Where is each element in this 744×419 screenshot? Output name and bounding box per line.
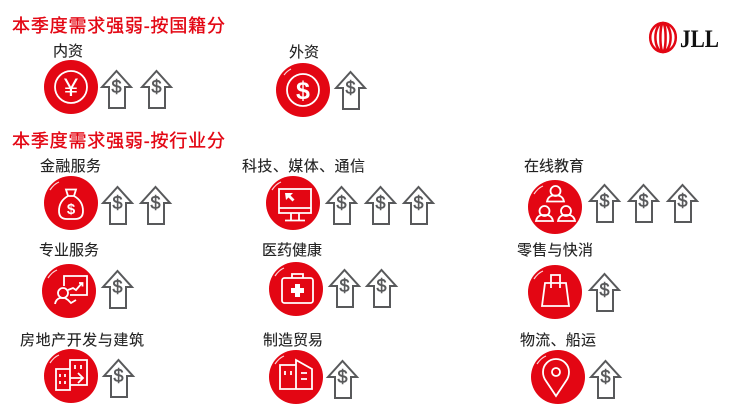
- arrow: up: $: [112, 193, 123, 213]
- icon: buildings: [44, 349, 98, 403]
- arrow: up: $: [111, 77, 122, 97]
- icon: presenter: [42, 264, 96, 318]
- item: tech media telecom: [242, 158, 433, 230]
- arrow: up: [327, 187, 356, 224]
- arrow: up: [590, 185, 619, 222]
- icon: dollar: $: [296, 77, 310, 105]
- item: tech media telecom: 科技、媒体、通信: [242, 158, 365, 175]
- icon: map pin: [531, 350, 585, 404]
- arrow: up: [404, 187, 433, 224]
- arrow: up: $: [339, 276, 350, 296]
- logo: JLL: JLL: [680, 26, 719, 53]
- arrow: up: $: [413, 193, 424, 213]
- icon: money bag: $: [67, 201, 76, 218]
- icon: shopping bag: [528, 265, 582, 319]
- item: online education: 在线教育: [524, 158, 584, 175]
- icon: people: [528, 180, 582, 234]
- item: retail: [517, 242, 619, 319]
- arrow: up: $: [600, 367, 611, 387]
- icon: medical kit: [269, 262, 323, 316]
- arrow: up: $: [336, 193, 347, 213]
- arrow: up: $: [638, 191, 649, 211]
- item: financial services: 金融服务: [40, 158, 101, 175]
- logo: JLL: [650, 23, 719, 53]
- arrow: up: [629, 185, 658, 222]
- arrow: up: $: [376, 276, 387, 296]
- item: foreign capital: 外资: [289, 44, 319, 61]
- arrow: up: $: [113, 366, 124, 386]
- icon: factory: [269, 350, 323, 404]
- arrow: up: [366, 187, 395, 224]
- arrow: up: [668, 185, 697, 222]
- item: real estate and construction: [20, 332, 144, 403]
- arrow: up: $: [599, 191, 610, 211]
- icon: monitor: [266, 176, 320, 230]
- item: real estate and construction: 房地产开发与建筑: [20, 332, 144, 349]
- item: domestic capital: 内资: [53, 43, 83, 60]
- item: healthcare: 医药健康: [262, 242, 322, 259]
- item: retail: 零售与快消: [517, 242, 593, 259]
- item: domestic capital: [44, 43, 171, 114]
- arrow: up: $: [150, 193, 161, 213]
- arrow: up: $: [375, 193, 386, 213]
- icon: yen: ¥: [63, 74, 78, 102]
- item: professional services: 专业服务: [39, 242, 99, 259]
- item: professional services: [39, 242, 132, 318]
- heading: by nationality: 本季度需求强弱-按国籍分: [12, 16, 225, 36]
- heading: by industry: 本季度需求强弱-按行业分: [12, 131, 225, 151]
- item: manufacturing and trade: [263, 332, 357, 404]
- item: online education: [524, 158, 697, 234]
- item: logistics and shipping: [520, 332, 620, 404]
- item: logistics and shipping: 物流、船运: [520, 332, 596, 349]
- item: healthcare: [262, 242, 396, 316]
- item: foreign capital: [276, 44, 365, 117]
- arrow: up: $: [151, 77, 162, 97]
- item: manufacturing and trade: 制造贸易: [263, 332, 323, 349]
- arrow: up: $: [337, 367, 348, 387]
- arrow: up: $: [345, 78, 356, 98]
- item: financial services: [40, 158, 170, 230]
- arrow: up: $: [677, 191, 688, 211]
- arrow: up: $: [599, 280, 610, 300]
- arrow: up: $: [112, 277, 123, 297]
